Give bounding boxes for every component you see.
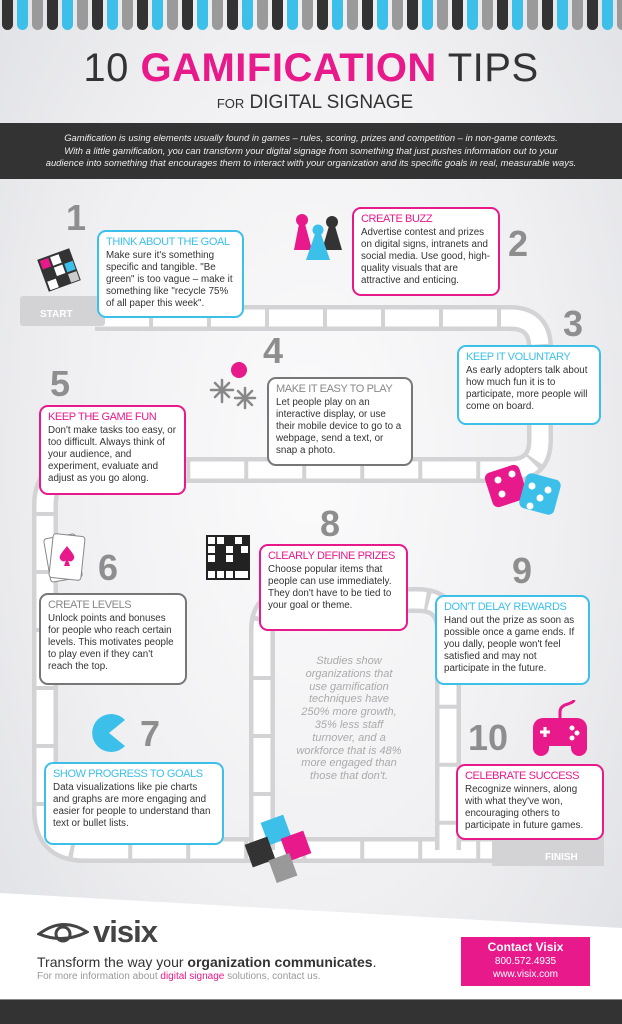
contact box (461, 937, 590, 986)
tip 3: As early adopters talk about how much fun it is to participate, more people will come on board. (466, 365, 587, 412)
icon: cards (44, 533, 86, 582)
tip 2: CREATE BUZZ (361, 213, 432, 225)
tip 1 (97, 230, 244, 318)
icon: pawns (294, 214, 342, 260)
logo: visix: visix (93, 914, 157, 949)
tip 5: Don't make tasks too easy, or too difficult. Always think of your audience, and experiment, evaluate and adjust as you go along. (48, 425, 176, 484)
tip 10: Recognize winners, along with what they've won, encouraging others to participate in future games. (465, 784, 583, 831)
tip 3: KEEP IT VOLUNTARY (466, 351, 570, 363)
tip 9: DON'T DELAY REWARDS (444, 601, 566, 613)
icon: pacman (92, 714, 125, 752)
tip 1: Make sure it's something specific and tangible. "Be green" is too vague – make it something like "recycle 75% of all paper this week". (106, 250, 233, 309)
tip 7: SHOW PROGRESS TO GOALS (53, 768, 203, 780)
stats text: Studies show organizations that use gamification techniques have 250% more growth, 35% less staff turnover, and a workforce that is 48% more engaged than those that don't. (296, 655, 402, 782)
tip 7: Data visualizations like pie charts and graphs are more engaging and easier for people to understand than text or bullet lists. (53, 782, 210, 829)
intro band: With a little gamification, you can transform your digital signage from something that just pushes information out to your (64, 144, 558, 156)
icon: crossword (206, 535, 250, 580)
tip 6: Unlock points and bonuses for people who reach certain levels. This motivates people to play even if they can't reach the top. (48, 613, 174, 672)
tip 4: MAKE IT EASY TO PLAY (276, 383, 392, 395)
tip 1: THINK ABOUT THE GOAL (106, 236, 230, 248)
contact box: www.visix.com (493, 969, 558, 980)
number 9: 9 (512, 550, 532, 591)
number 2: 2 (508, 223, 528, 264)
tip 6: CREATE LEVELS (48, 599, 131, 611)
intro band (0, 123, 622, 179)
number 5: 5 (50, 363, 70, 404)
icon: dice (484, 464, 561, 515)
tip 4 (267, 377, 413, 466)
tip 8: Choose popular items that people can use immediately. They don't have to be tied to your goal or theme. (268, 564, 391, 611)
tip 8: CLEARLY DEFINE PRIZES (268, 550, 395, 562)
tip 10: CELEBRATE SUCCESS (465, 770, 579, 782)
tip 5 (39, 405, 186, 495)
start block (20, 296, 105, 326)
tip 9: Hand out the prize as soon as possible once a game ends. If you dally, people won't feel satisfied and may not participate in the future. (444, 615, 574, 674)
top stripes (2, 0, 622, 30)
number 3: 3 (563, 303, 583, 344)
tip 2: Advertise contest and prizes on digital signs, intranets and social media. Use good, high-quality visuals that are attractive and enticing. (361, 227, 490, 286)
icon: puzzle pieces (244, 814, 312, 883)
tip 2 (352, 207, 500, 296)
number 6: 6 (98, 547, 118, 588)
bottom bar (0, 999, 622, 1024)
title: 10 GAMIFICATION TIPS (83, 46, 539, 90)
number 10: 10 (468, 717, 508, 758)
icon: cube (37, 248, 81, 292)
number 1: 1 (66, 197, 86, 238)
subtitle: FOR DIGITAL SIGNAGE (217, 92, 413, 113)
tip 3 (457, 345, 601, 425)
start block: START (40, 309, 73, 320)
tip 7 (44, 762, 224, 845)
tip 8 (259, 544, 408, 631)
icon: gamepad (533, 700, 587, 756)
more info line: For more information about digital signage solutions, contact us. (37, 971, 320, 982)
number 8: 8 (320, 503, 340, 544)
number 7: 7 (140, 713, 160, 754)
tip 9 (435, 595, 590, 685)
tip 5: KEEP THE GAME FUN (48, 411, 156, 423)
intro band: Gamification is using elements usually found in games – rules, scoring, prizes and competition – in non-game contexts. (64, 132, 558, 143)
tip 6 (39, 593, 187, 685)
finish block (492, 832, 604, 866)
contact box: 800.572.4935 (495, 956, 556, 967)
tip 4: Let people play on an interactive display, or use their mobile device to go to a webpage, send a text, or snap a photo. (276, 397, 401, 456)
logo: visix (37, 914, 158, 949)
number 4: 4 (263, 330, 283, 371)
intro band: audience into something that encourages them to interact with your organization and its specific goals in real, measurable ways. (46, 157, 576, 168)
footer (0, 893, 622, 999)
finish block: FINISH (545, 852, 578, 863)
game board track (20, 296, 604, 866)
icon: jacks (210, 362, 256, 410)
tagline: Transform the way your organization communicates. (37, 954, 376, 970)
tip 10 (456, 764, 604, 840)
contact box: Contact Visix (488, 940, 563, 954)
